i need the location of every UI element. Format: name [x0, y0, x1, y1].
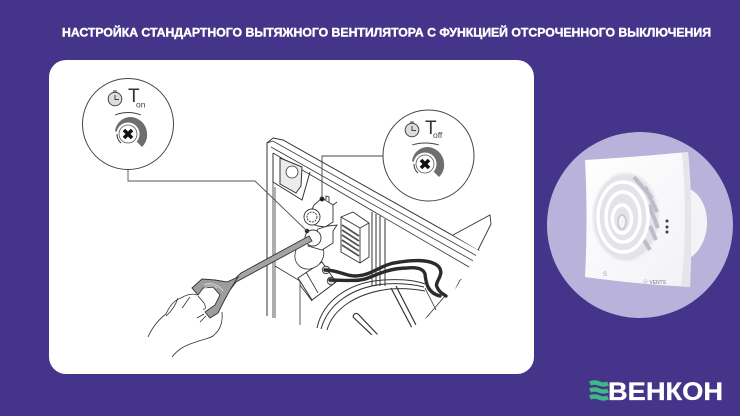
callout: T off	[383, 110, 474, 201]
logo wordmark: ВЕНКОН	[608, 378, 723, 406]
fan grille	[593, 173, 659, 261]
callout leader: T on	[128, 169, 308, 232]
title: НАСТРОЙКА СТАНДАРТНОГО ВЫТЯЖНОГО ВЕНТИЛЯТОРА С ФУНКЦИЕЙ ОТСРОЧЕННОГО ВЫКЛЮЧЕНИЯ	[62, 24, 711, 40]
fan plate	[585, 152, 691, 287]
diagram: screwdriver	[192, 236, 312, 318]
callout: T on	[82, 78, 174, 170]
icon: knob	[412, 147, 444, 177]
icon: knob	[115, 117, 147, 147]
diagram: potentiometers	[304, 196, 337, 250]
icon: clock	[108, 91, 122, 106]
brand mark: ⓥ VENTS	[643, 279, 667, 286]
scale arrow	[412, 143, 439, 145]
icon: clock	[405, 122, 419, 137]
diagram: wires	[325, 261, 446, 296]
label: T on: T	[128, 86, 140, 107]
callout: T off: off	[433, 130, 443, 140]
panel: instruction card	[49, 60, 534, 374]
logo waves	[590, 382, 608, 398]
fan motor tube	[680, 186, 707, 262]
indicator dots	[666, 220, 668, 234]
logo: Венкон	[590, 378, 723, 406]
label: T off: T	[425, 118, 437, 139]
callout leader: T off	[322, 156, 383, 199]
switch mark: S	[603, 272, 607, 278]
diagram: hand	[148, 294, 222, 357]
diagram: grille vent block	[341, 212, 369, 263]
scale arrow	[115, 112, 141, 115]
diagram: fan housing	[267, 138, 500, 336]
callout: T on: on	[136, 100, 146, 110]
product backdrop circle	[547, 132, 733, 318]
product: fan photo	[547, 132, 733, 318]
